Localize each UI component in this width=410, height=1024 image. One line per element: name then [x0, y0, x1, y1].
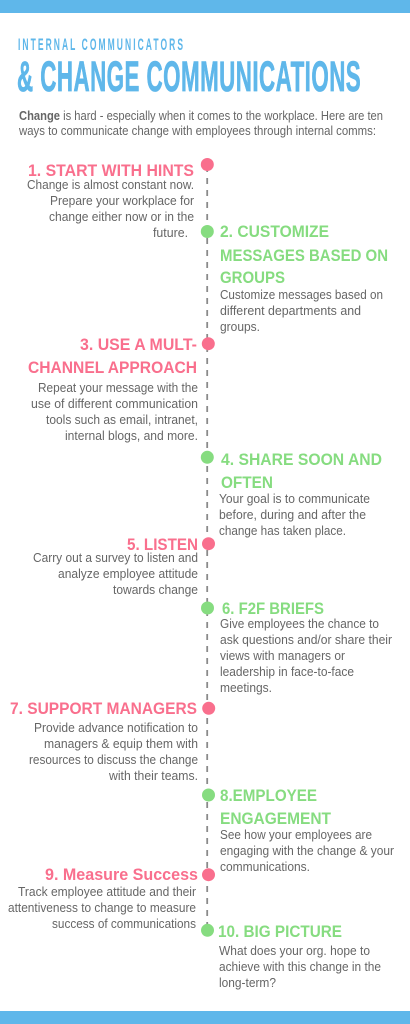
- main title: & CHANGE COMMUNICATIONS: [17, 53, 361, 101]
- step 6 text: leadership in face-to-face: [220, 664, 354, 679]
- step 10 text: achieve with this change in the: [219, 959, 381, 974]
- step 4 text: [219, 491, 370, 538]
- step 1 text: Change is almost constant now.: [27, 177, 194, 192]
- step 9 text: success of communications: [52, 916, 196, 931]
- step 3 text: Repeat your message with the: [38, 380, 198, 395]
- step 7 text: managers & equip them with: [44, 736, 198, 751]
- step 10 text: [219, 943, 381, 990]
- step 4 text: Your goal is to communicate: [219, 491, 370, 506]
- step 6 text: Give employees the chance to: [220, 616, 379, 631]
- step 8 text: engaging with the change & your: [220, 843, 395, 858]
- step 5 text: [33, 550, 198, 597]
- step 3 text: internal blogs, and more.: [65, 428, 198, 443]
- step 7 heading: 7. SUPPORT MANAGERS: [10, 699, 197, 718]
- step 10: [218, 922, 381, 990]
- step 8 text: See how your employees are: [220, 827, 372, 842]
- step 7 text: Provide advance notification to: [34, 720, 198, 735]
- top bar: [0, 0, 410, 13]
- step 1 text: [27, 177, 195, 240]
- step 7: [10, 699, 198, 783]
- step 4: [219, 450, 382, 538]
- step 3 text: use of different communication: [31, 396, 198, 411]
- step 8 text: communications.: [220, 859, 310, 874]
- step 9 text: [8, 884, 197, 931]
- step 10 text: long-term?: [219, 975, 276, 990]
- title block: [17, 35, 361, 101]
- step 6 text: ask questions and/or share their: [220, 632, 393, 647]
- step 8 heading: [220, 786, 332, 828]
- step 5 text: Carry out a survey to listen and: [33, 550, 198, 565]
- step 8: [220, 786, 395, 874]
- step 5 text: analyze employee attitude: [58, 566, 198, 581]
- step 7 text: resources to discuss the change: [29, 752, 198, 767]
- step 10 text: What does your org. hope to: [219, 943, 370, 958]
- step 1 text: future.: [153, 225, 188, 240]
- step 4 text: before, during and after the: [219, 507, 366, 522]
- step 5 heading: 5. LISTEN: [127, 535, 198, 554]
- step 2 text: Customize messages based on: [220, 287, 383, 302]
- step 1 heading: 1. START WITH HINTS: [28, 161, 194, 180]
- step 6: [220, 599, 393, 695]
- step 3 text: tools such as email, intranet,: [46, 412, 198, 427]
- step 9 heading: 9. Measure Success: [45, 865, 198, 884]
- step 1 text: change either now or in the: [49, 209, 194, 224]
- step 9 text: attentiveness to change to measure: [8, 900, 196, 915]
- step 9 text: Track employee attitude and their: [18, 884, 197, 899]
- step 2 heading: GROUPS: [220, 268, 285, 287]
- step 5 text: towards change: [113, 582, 198, 597]
- step 8 heading: 8.EMPLOYEE: [220, 786, 317, 805]
- step 3: [28, 335, 198, 443]
- subtitle: INTERNAL COMMUNICATORS: [18, 35, 183, 54]
- step 9: [8, 865, 198, 931]
- step 2: [220, 222, 388, 334]
- step 3 text: [31, 380, 198, 443]
- step 2 text: different departments and: [220, 303, 361, 318]
- step 2 heading: MESSAGES BASED ON: [220, 246, 388, 265]
- step 6 text: [220, 616, 393, 695]
- step 7 text: [29, 720, 198, 783]
- step 1: [27, 161, 195, 240]
- step 4 heading: OFTEN: [221, 473, 273, 492]
- bottom bar: [0, 1011, 410, 1024]
- step 2 heading: [220, 222, 388, 287]
- step 2 heading: 2. CUSTOMIZE: [220, 222, 329, 241]
- step 6 text: views with managers or: [220, 648, 346, 663]
- step 2 text: groups.: [220, 319, 260, 334]
- step 4 heading: 4. SHARE SOON AND: [221, 450, 382, 469]
- step 1 text: Prepare your workplace for: [50, 193, 195, 208]
- step 3 heading: [28, 335, 197, 377]
- timeline dashed line: [206, 166, 208, 926]
- step 6 heading: 6. F2F BRIEFS: [222, 599, 324, 618]
- step 8 heading: ENGAGEMENT: [220, 809, 332, 828]
- intro text: ways to communicate change with employees through internal comms:: [18, 124, 376, 138]
- step 8 text: [220, 827, 395, 874]
- step 10 heading: 10. BIG PICTURE: [218, 922, 342, 941]
- step 4 heading: [221, 450, 382, 492]
- intro text: [18, 109, 383, 138]
- timeline dots: [201, 158, 215, 937]
- step 7 text: with their teams.: [108, 768, 198, 783]
- step 6 text: meetings.: [220, 680, 272, 695]
- step 3 heading: 3. USE A MULT-: [80, 335, 197, 354]
- step 4 text: change has taken place.: [219, 523, 346, 538]
- step 2 text: [220, 287, 383, 334]
- step 3 heading: CHANNEL APPROACH: [28, 358, 197, 377]
- step 5: [33, 535, 198, 597]
